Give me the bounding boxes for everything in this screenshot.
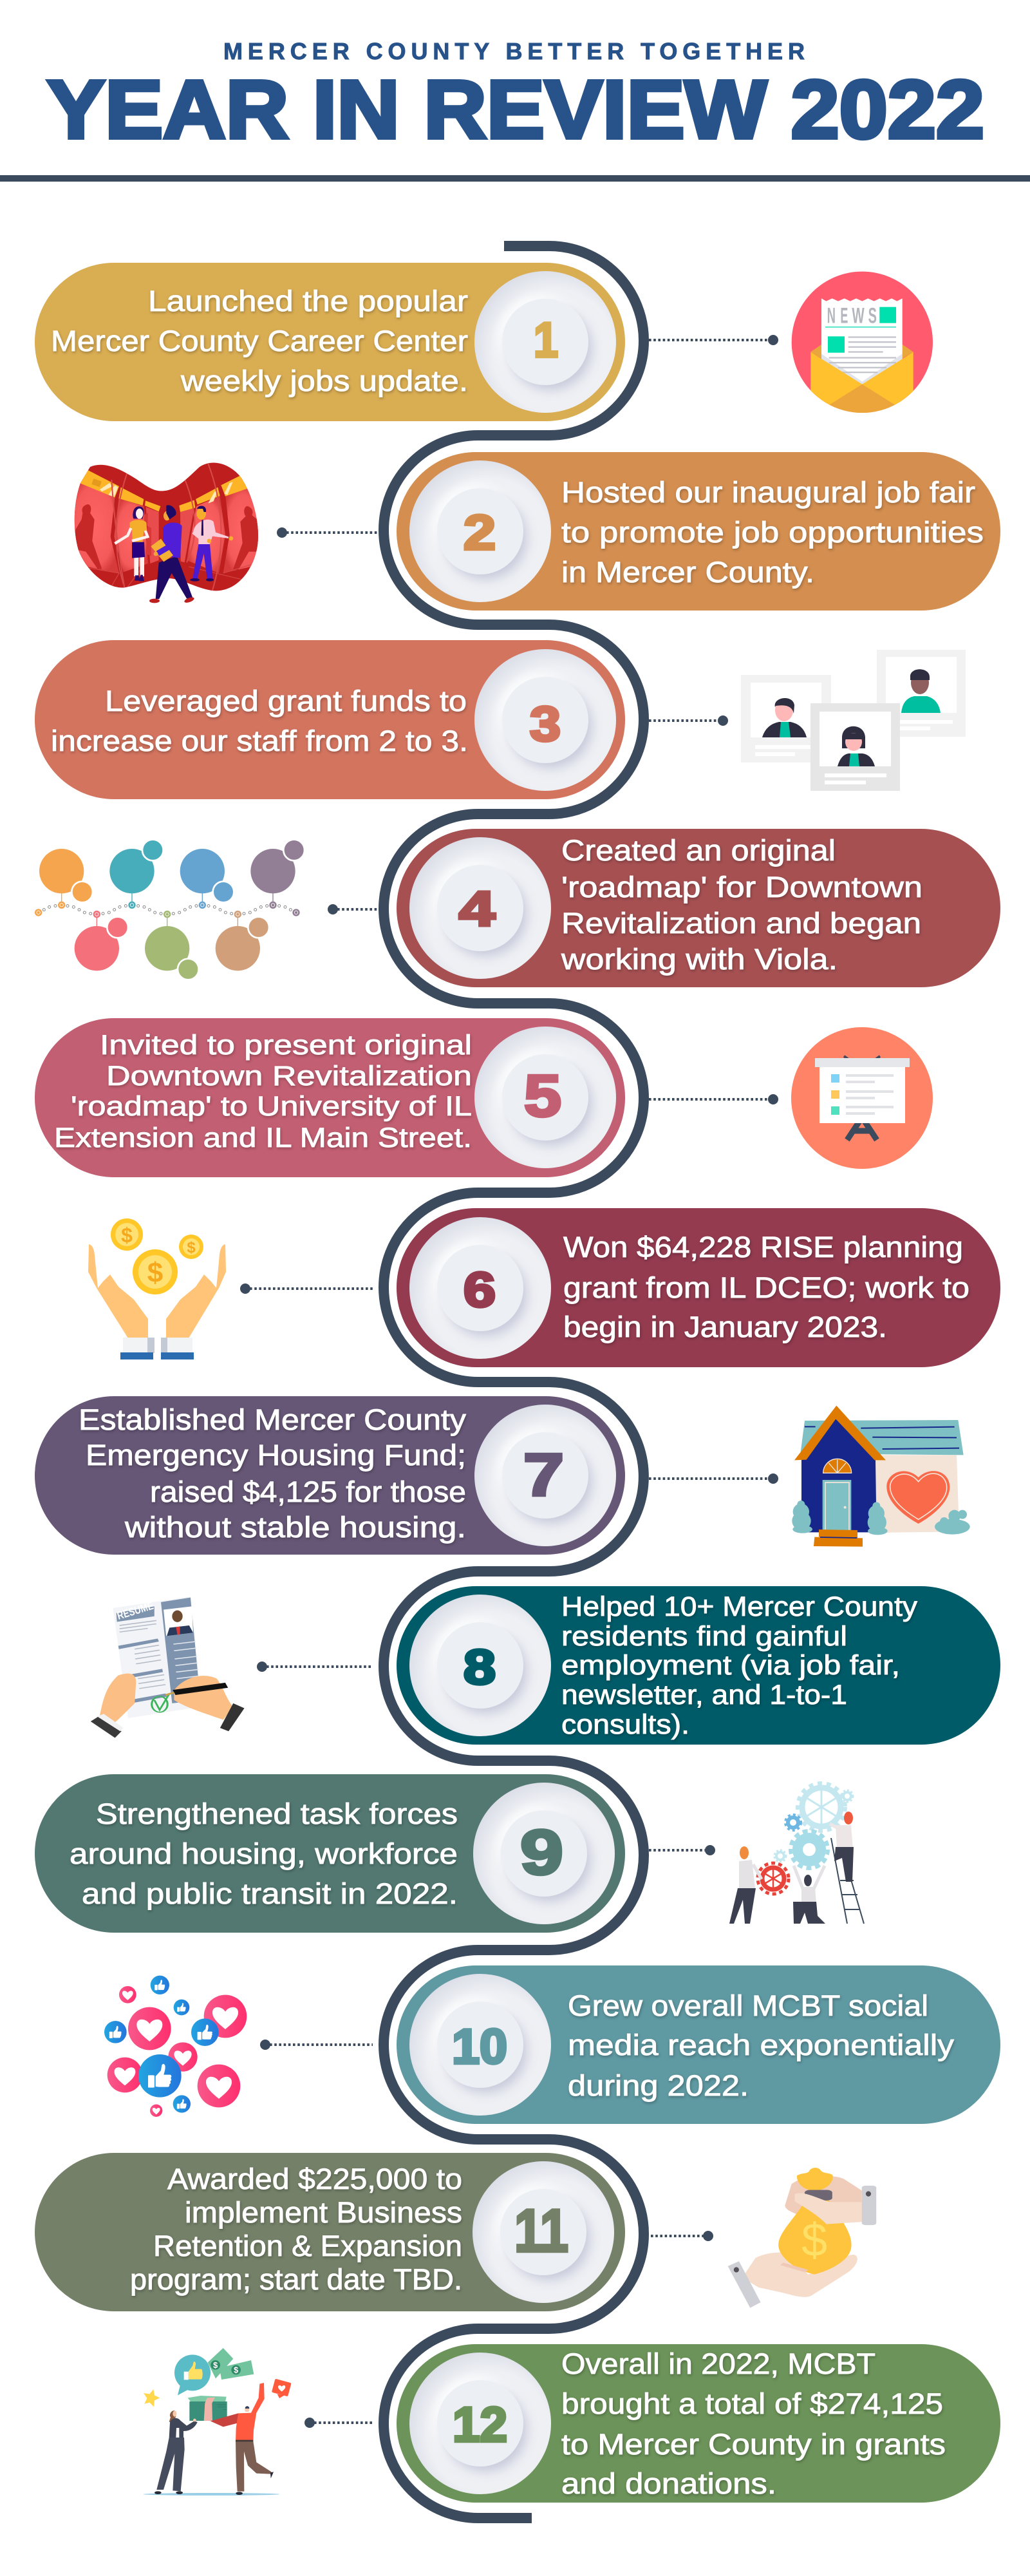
text 4: 'roadmap' for Downtown <box>561 871 922 904</box>
number disc 11 <box>473 2161 614 2303</box>
icon: presentation board <box>791 1027 933 1169</box>
text 4: working with Viola. <box>561 943 838 976</box>
text 9 <box>70 1797 458 1910</box>
icon: people with gift and money <box>143 2348 292 2496</box>
text 12 <box>561 2347 946 2500</box>
text 5: Downtown Revitalization <box>106 1061 472 1092</box>
panel: step 5 <box>35 1018 933 1177</box>
text 2: to promote job opportunities <box>561 516 984 549</box>
panel: step 8 <box>91 1586 1000 1745</box>
text 10: Grew overall MCBT social <box>568 1989 928 2022</box>
panel: step 11 <box>35 2153 876 2311</box>
panel: step 3 <box>35 640 966 799</box>
text 8: residents find gainful <box>561 1621 847 1652</box>
text 8 <box>561 1591 918 1740</box>
text 8: Helped 10+ Mercer County <box>561 1591 918 1622</box>
number disc 6 <box>409 1217 551 1359</box>
text 7: Emergency Housing Fund; <box>86 1439 466 1472</box>
number disc 11: 11 <box>514 2197 568 2264</box>
subtitle: MERCER COUNTY BETTER TOGETHER <box>223 38 805 64</box>
text 1: Mercer County Career Center <box>51 325 468 357</box>
text 11: Awarded $225,000 to <box>167 2163 462 2195</box>
panel: step 10 <box>104 1965 1000 2124</box>
text 3 <box>51 685 468 757</box>
pill 11 <box>35 2153 625 2311</box>
text 11: implement Business <box>185 2196 462 2229</box>
icon: newsletter envelope: N <box>827 303 836 328</box>
text 12: and donations. <box>561 2467 776 2500</box>
panel: step 6 <box>88 1208 1000 1367</box>
number disc 1 <box>474 271 616 413</box>
text 11: Retention & Expansion <box>153 2230 462 2262</box>
number disc 7: 7 <box>523 1441 564 1508</box>
pill 2 <box>397 452 1000 611</box>
connector 9 <box>649 1845 715 1855</box>
text 8: employment (via job fair, <box>561 1650 900 1681</box>
number disc 3: 3 <box>530 697 561 752</box>
text 1 <box>51 285 468 397</box>
panel: step 7 <box>35 1396 970 1555</box>
text 6: Won $64,228 RISE planning <box>563 1231 963 1264</box>
text 5 <box>54 1030 472 1153</box>
number disc 2: 2 <box>464 506 496 560</box>
text 10: media reach exponentially <box>568 2029 955 2061</box>
icon: hands and coins: $ <box>147 1257 163 1289</box>
text 10 <box>568 1989 955 2102</box>
serpentine timeline track <box>384 246 644 2518</box>
text 7: without stable housing. <box>124 1511 466 1544</box>
pill 4 <box>397 829 1000 987</box>
icon: social reactions <box>104 1976 247 2117</box>
text 4 <box>561 834 922 976</box>
text 9: around housing, workforce <box>70 1837 458 1870</box>
number disc 9: 9 <box>520 1817 563 1888</box>
text 7: Established Mercer County <box>79 1403 467 1436</box>
text 5: Extension and IL Main Street. <box>54 1122 472 1153</box>
connector 5 <box>649 1094 778 1104</box>
icon: money bag handover <box>728 2168 876 2308</box>
text 1: Launched the popular <box>148 285 468 317</box>
panel: step 9 <box>35 1774 864 1933</box>
pill 9 <box>35 1774 625 1933</box>
pill 7 <box>35 1396 625 1555</box>
icon: newsletter envelope: W <box>852 303 865 328</box>
connector 3 <box>649 715 728 726</box>
panel: step 4 <box>35 829 1000 987</box>
woman <box>115 506 147 581</box>
number disc 7 <box>474 1405 616 1546</box>
text 12: Overall in 2022, MCBT <box>561 2347 876 2380</box>
text 4: Created an original <box>561 834 836 867</box>
text 11 <box>130 2163 462 2296</box>
icon: people with gift and money: $ <box>213 2361 218 2370</box>
number disc 10: 10 <box>452 2020 507 2074</box>
text 3: increase our staff from 2 to 3. <box>51 724 468 757</box>
pill 12 <box>397 2344 1000 2503</box>
text 10: during 2022. <box>568 2069 749 2102</box>
text 12: brought a total of $274,125 <box>561 2387 943 2420</box>
icon: newsletter envelope <box>792 272 933 421</box>
text 9: and public transit in 2022. <box>82 1877 458 1910</box>
number disc 5 <box>474 1027 616 1168</box>
connector 10 <box>260 2040 373 2050</box>
number disc 3 <box>474 649 616 791</box>
connector 7 <box>649 1473 778 1484</box>
icon: newsletter envelope: S <box>868 303 877 328</box>
connector 11 <box>651 2231 713 2241</box>
pill 6 <box>397 1208 1000 1367</box>
text 7 <box>79 1403 467 1544</box>
text 12: to Mercer County in grants <box>561 2428 946 2461</box>
icon: money bag handover: $ <box>801 2215 827 2266</box>
panel: step 12 <box>143 2344 1000 2503</box>
text 9: Strengthened task forces <box>96 1797 458 1830</box>
icon: job fair illustration <box>69 463 264 604</box>
text 8: consults). <box>561 1709 689 1740</box>
pill 5 <box>35 1018 625 1177</box>
connector 12 <box>304 2418 374 2428</box>
connector 1 <box>649 335 778 345</box>
icon: hands and coins: $ <box>121 1224 133 1247</box>
icon: resume and hands <box>91 1596 245 1738</box>
text 11: program; start date TBD. <box>130 2263 462 2296</box>
text 6: grant from IL DCEO; work to <box>563 1271 969 1304</box>
icon: resume and hands: RESUME <box>116 1600 155 1622</box>
pill 8 <box>397 1586 1000 1745</box>
text 8: newsletter, and 1-to-1 <box>561 1680 847 1710</box>
pill 1 <box>35 263 625 421</box>
connector 4 <box>328 904 379 914</box>
connector 2 <box>277 527 379 538</box>
icon: newsletter envelope: E <box>840 303 848 328</box>
number disc 2 <box>409 460 551 602</box>
number disc 9 <box>473 1783 615 1924</box>
connector 6 <box>240 1283 373 1294</box>
icon: people with gift and money: $ <box>234 2366 238 2375</box>
icon: house with heart <box>792 1406 970 1547</box>
text 3: Leveraged grant funds to <box>105 685 467 717</box>
connector 8 <box>257 1662 373 1672</box>
text 5: 'roadmap' to University of IL <box>71 1091 472 1122</box>
panel: step 2 <box>69 452 1000 611</box>
text 2 <box>561 476 984 589</box>
number disc 1: 1 <box>534 313 558 368</box>
number disc 4 <box>409 837 551 979</box>
icon: staff profile cards <box>741 650 966 791</box>
text 2: in Mercer County. <box>561 556 814 589</box>
number disc 6: 6 <box>464 1263 496 1318</box>
number disc 5: 5 <box>524 1063 561 1129</box>
number disc 8 <box>409 1595 551 1736</box>
number disc 8: 8 <box>464 1640 496 1695</box>
icon: roadmap bubbles <box>35 840 304 980</box>
text 5: Invited to present original <box>100 1030 472 1061</box>
man walking <box>149 505 195 604</box>
text 1: weekly jobs update. <box>180 365 468 397</box>
icon: team and gears <box>729 1783 864 1924</box>
pill 3 <box>35 640 625 799</box>
text 7: raised $4,125 for those <box>150 1475 466 1508</box>
number disc 4: 4 <box>459 882 495 936</box>
number disc 10 <box>409 1974 551 2116</box>
text 2: Hosted our inaugural job fair <box>561 476 975 509</box>
number disc 12 <box>409 2353 551 2494</box>
panel: step 1 <box>35 263 933 421</box>
pill 10 <box>397 1965 1000 2124</box>
icon: hands and coins: $ <box>187 1239 196 1256</box>
number disc 12: 12 <box>453 2398 507 2452</box>
title: YEAR IN REVIEW 2022 <box>47 64 984 156</box>
text 6: begin in January 2023. <box>563 1311 887 1343</box>
icon: hands and coins <box>88 1218 226 1359</box>
text 4: Revitalization and began <box>561 907 921 940</box>
man in shirt <box>190 506 233 582</box>
text 6 <box>563 1231 969 1343</box>
